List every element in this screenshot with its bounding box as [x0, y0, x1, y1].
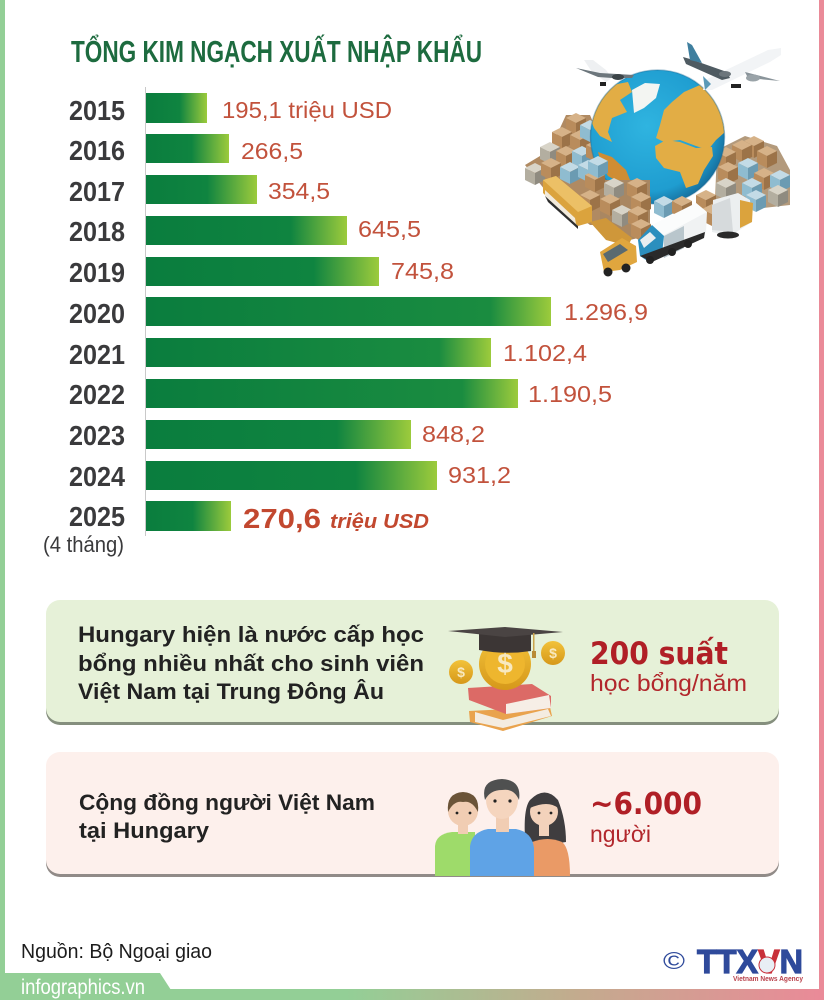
row 2016: 266,5 — [241, 138, 303, 164]
truck: white box right — [712, 193, 753, 238]
row 2017 — [69, 175, 330, 207]
panel: community — [46, 752, 779, 877]
row 2024: 2024 — [69, 461, 125, 492]
row 2019 — [69, 257, 454, 288]
row 2019: 2019 — [69, 257, 125, 288]
row 2020 — [69, 297, 648, 329]
icon: three people — [435, 779, 570, 876]
logo: TTXVN — [663, 943, 804, 983]
truck: yellow loader and front cab — [590, 218, 637, 276]
logo: TTXVN: © — [663, 948, 685, 975]
row 2024 — [69, 461, 511, 492]
row 2019: 745,8 — [391, 258, 454, 284]
icon: graduation cap, coins and books — [448, 627, 565, 731]
icon: graduation cap, coins and books: $ — [497, 648, 513, 679]
row 2023: 848,2 — [422, 421, 485, 447]
plane: left — [576, 60, 634, 86]
row 2017: 2017 — [69, 176, 125, 207]
community text — [79, 790, 375, 843]
row 2015 — [69, 93, 392, 126]
cargo behind globe — [525, 113, 790, 225]
bar chart — [43, 87, 648, 557]
row 2018: 645,5 — [358, 216, 421, 242]
man left — [435, 832, 475, 876]
logo: TTXVN: TTXVN — [697, 943, 803, 980]
cap — [479, 634, 531, 653]
community text: Cộng đồng người Việt Nam — [79, 790, 375, 815]
man center — [470, 829, 534, 876]
plane: right — [683, 42, 781, 90]
row 2025: triệu USD — [330, 511, 429, 533]
scholarship text: Việt Nam tại Trung Đông Âu — [78, 679, 384, 704]
row 2023 — [69, 420, 485, 451]
illustration: globe, planes, cargo and trucks — [525, 42, 790, 276]
row 2025 — [69, 501, 429, 534]
row 2023: 2023 — [69, 420, 125, 451]
community figures: người — [590, 821, 651, 847]
source: Nguồn: Bộ Ngoại giao — [21, 941, 212, 963]
community text: tại Hungary — [79, 818, 210, 843]
panel: scholarships — [46, 600, 779, 731]
globe — [590, 70, 725, 204]
scholarship text: bổng nhiều nhất cho sinh viên — [78, 651, 424, 676]
truck: white trailer with blue cab — [638, 203, 707, 264]
row 2021: 2021 — [69, 339, 125, 370]
community figures — [590, 787, 702, 847]
icon: graduation cap, coins and books: $ — [457, 664, 465, 680]
note: 4 months: (4 tháng) — [43, 532, 124, 557]
icon: graduation cap, coins and books: $ — [549, 645, 557, 661]
row 2022: 1.190,5 — [528, 381, 612, 407]
scholarship figures: học bổng/năm — [590, 670, 747, 696]
row 2021 — [69, 338, 587, 370]
woman right — [525, 792, 566, 850]
scholarship figures: 200 suất — [590, 636, 728, 672]
scholarship figures — [590, 636, 747, 696]
truck: yellow trailer — [543, 176, 592, 229]
row 2016: 2016 — [69, 135, 125, 166]
row 2020: 2020 — [69, 298, 125, 329]
row 2015: 2015 — [69, 95, 125, 126]
row 2016 — [69, 134, 303, 166]
coin — [479, 638, 531, 690]
scholarship text — [78, 622, 424, 704]
row 2025: 270,6 — [243, 503, 321, 534]
books — [469, 707, 552, 731]
row 2025: 2025 — [69, 501, 125, 532]
logo: TTXVN: Vietnam News Agency — [733, 974, 804, 983]
row 2018 — [69, 216, 421, 247]
title: TỔNG KIM NGẠCH XUẤT NHẬP KHẨU — [71, 33, 482, 69]
community figures: ~6.000 — [590, 787, 702, 822]
site name: infographics.vn — [21, 976, 145, 999]
row 2022: 2022 — [69, 379, 125, 410]
row 2024: 931,2 — [448, 462, 511, 488]
row 2018: 2018 — [69, 216, 125, 247]
row 2022 — [69, 379, 612, 410]
row 2021: 1.102,4 — [503, 340, 587, 366]
row 2017: 354,5 — [268, 178, 330, 204]
row 2015: 195,1 triệu USD — [222, 97, 392, 123]
cargo in front of globe — [580, 156, 790, 241]
row 2020: 1.296,9 — [564, 299, 648, 325]
scholarship text: Hungary hiện là nước cấp học — [78, 622, 424, 647]
